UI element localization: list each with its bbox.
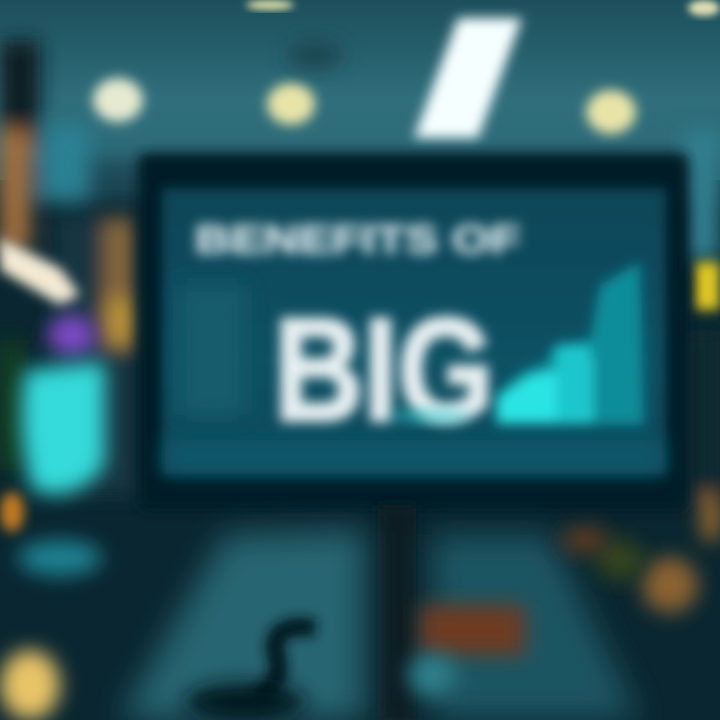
light: strip panel (414, 18, 522, 138)
right green blob (596, 540, 644, 580)
light: top left (246, 0, 294, 10)
cyan glow under G (390, 408, 470, 424)
lower room (0, 492, 698, 720)
screen lower band (165, 440, 663, 474)
floor panel left (120, 530, 365, 720)
big word: BIG (274, 288, 494, 451)
ceiling vent (287, 41, 343, 69)
right yellow object (695, 262, 720, 310)
heading text: BENEFITS OF (195, 218, 520, 262)
left cyan object (21, 362, 105, 494)
dark curl shape (255, 627, 315, 698)
monitor stand (378, 505, 416, 720)
light: round right (586, 90, 636, 134)
light: top right (688, 0, 720, 16)
screen left panel (180, 285, 245, 415)
right wall (685, 130, 720, 540)
left wall and column (0, 40, 140, 495)
teal blob by desk (408, 653, 456, 697)
monitor (138, 153, 688, 511)
right orange blob (642, 557, 698, 613)
cyan strip left (18, 540, 102, 576)
brown accent (561, 526, 609, 554)
light: round left (93, 78, 143, 122)
ceiling lights (93, 0, 720, 138)
brown desk (420, 605, 525, 655)
left sign: white angled bar (0, 238, 80, 305)
dark floor shadow (185, 684, 305, 720)
monitor screen (162, 188, 666, 474)
light: round centre (267, 83, 315, 125)
bottom left lamp (0, 650, 60, 720)
left purple glow (48, 315, 96, 355)
left orange dot (0, 492, 24, 532)
monitor frame (138, 153, 688, 511)
bar chart (495, 262, 644, 425)
floor panel right (432, 535, 640, 720)
